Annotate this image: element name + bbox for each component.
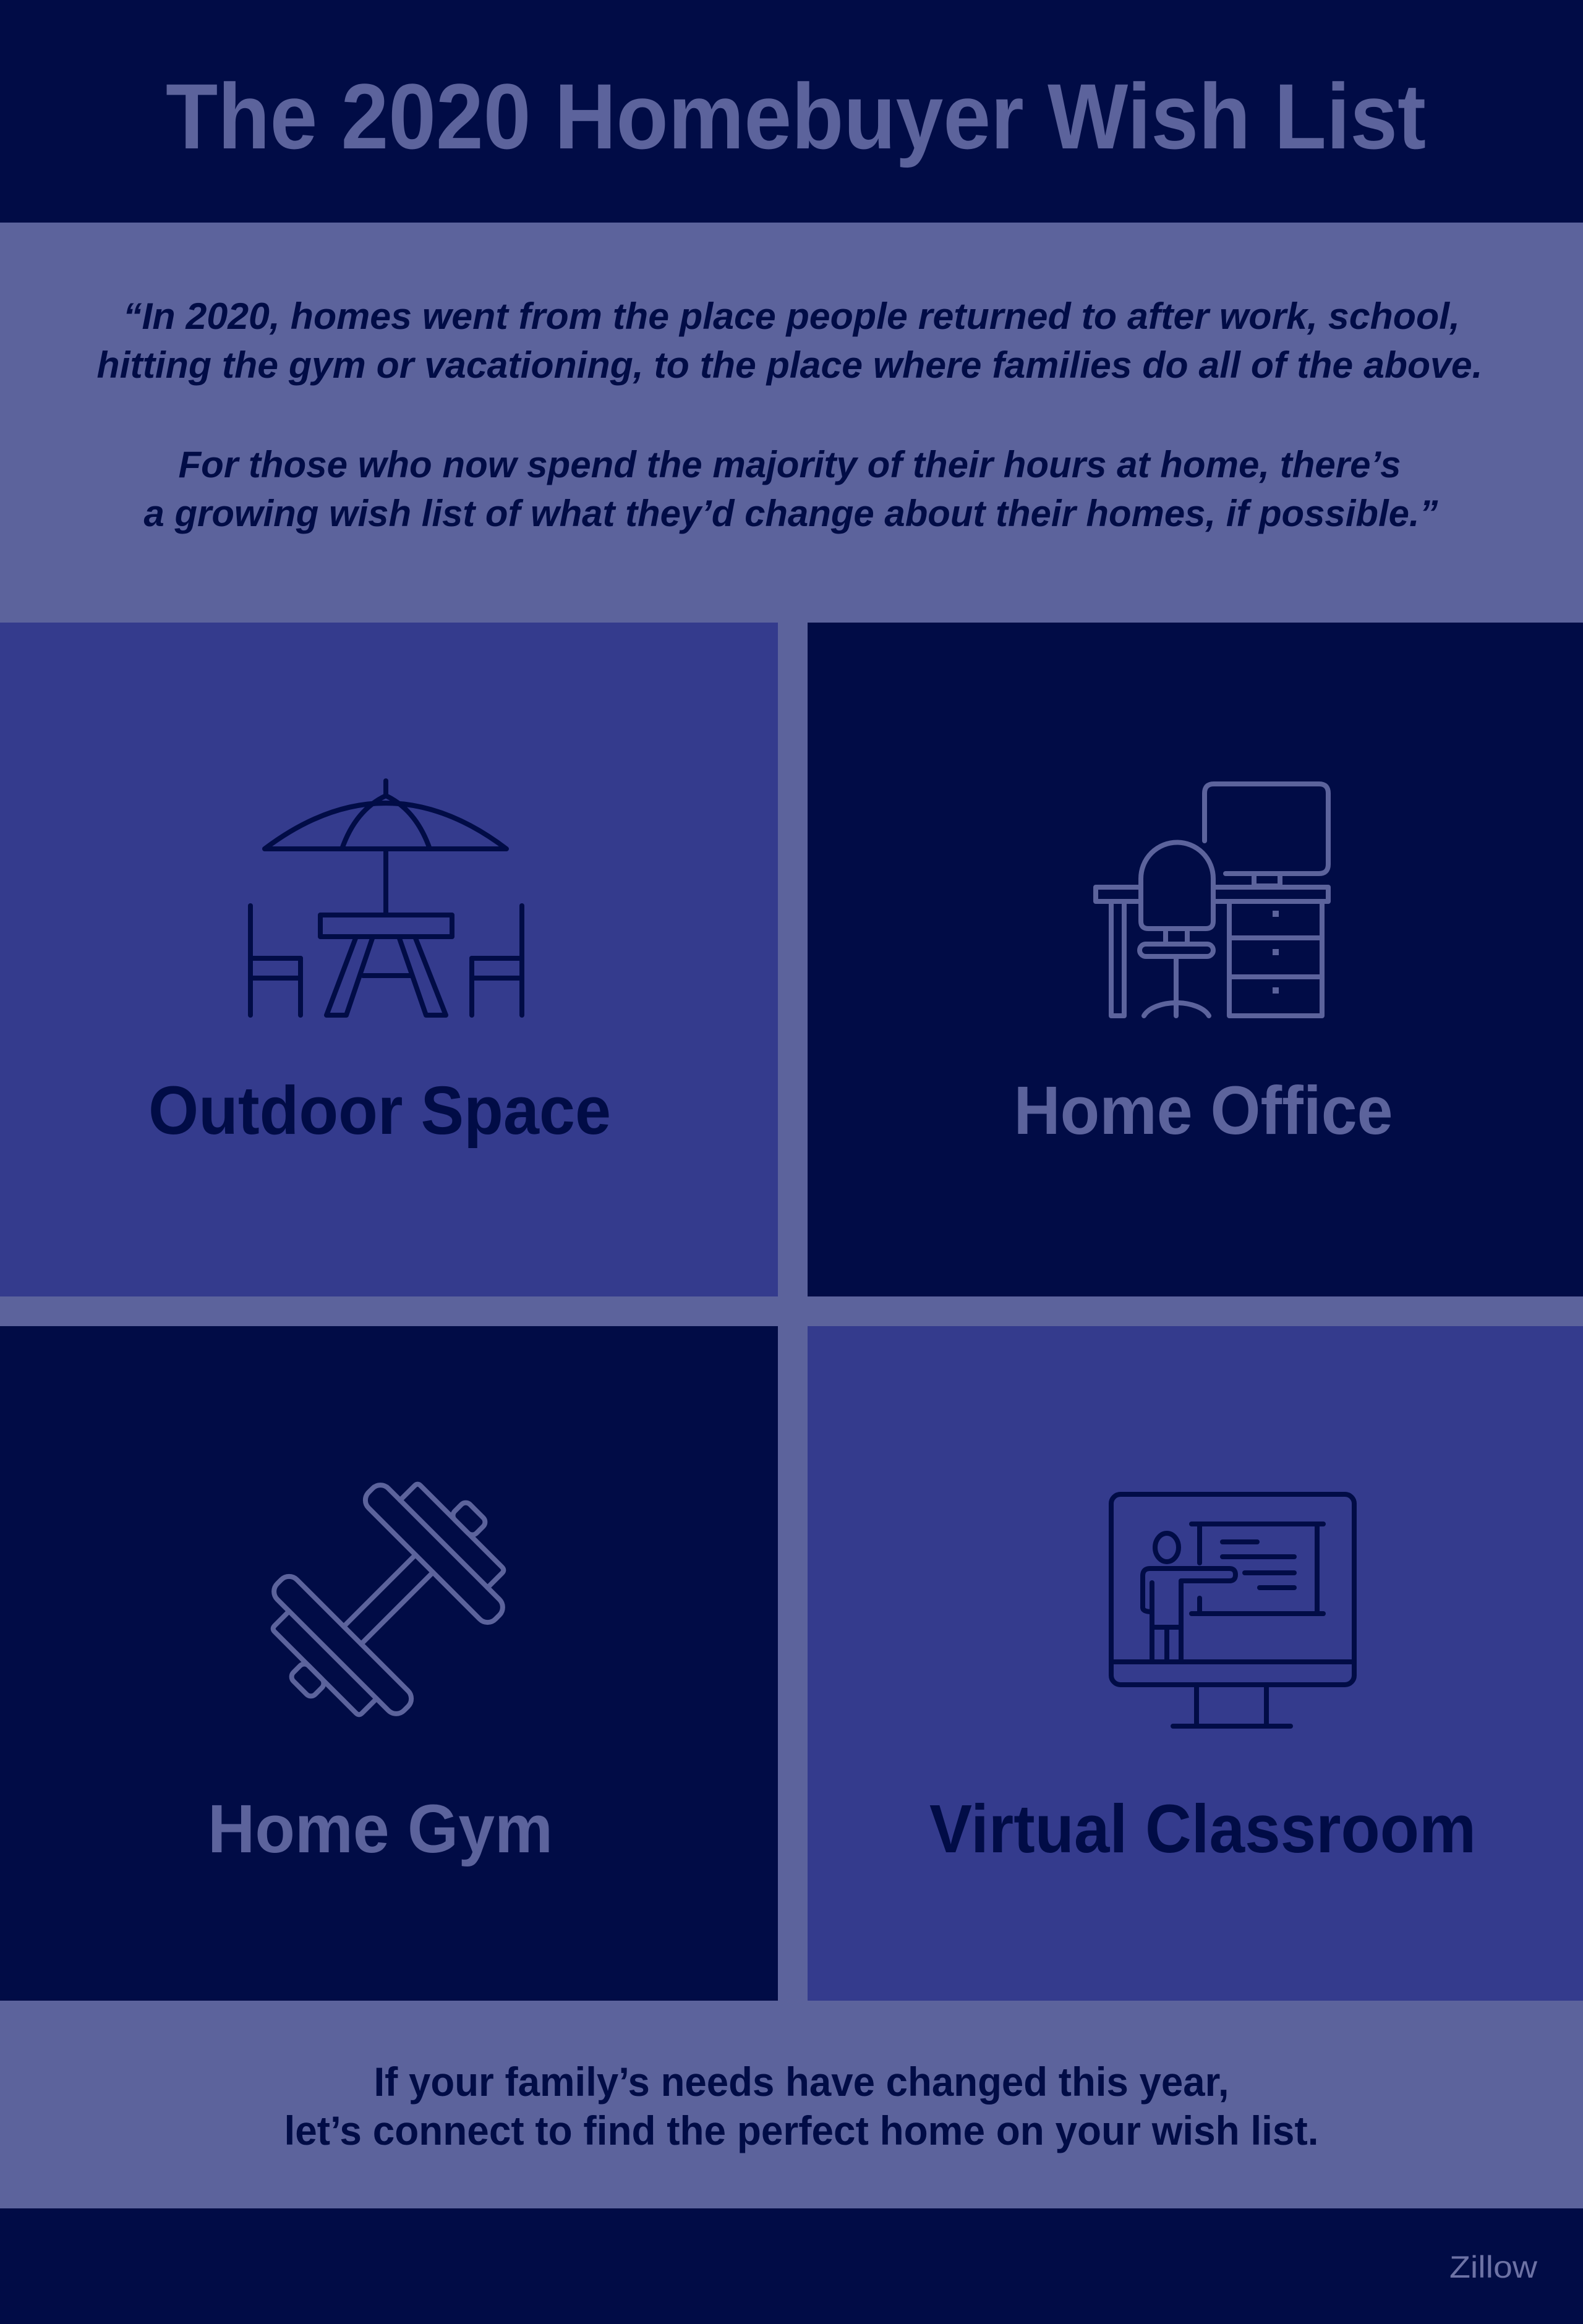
title: The 2020 Homebuyer Wish List [166, 64, 1426, 168]
icon: virtual classroom monitor [1111, 1494, 1354, 1726]
call to action text: let’s connect to find the perfect home on your wish list. [284, 2108, 1318, 2153]
icon: desk and chair [1096, 784, 1328, 1016]
panel: home office [808, 623, 1583, 1296]
logo text: Zillow: Zillow [1449, 2250, 1538, 2284]
label: virtual classroom: Virtual Classroom [929, 1791, 1476, 1867]
call to action text: If your family’s needs have changed this year, [373, 2059, 1229, 2105]
icon: patio umbrella table [250, 781, 522, 1015]
label: home office: Home Office [1014, 1073, 1393, 1149]
quote block: For those who now spend the majority of their hours at home, there’s [178, 444, 1401, 485]
footer band [0, 2208, 1583, 2324]
quote block [96, 296, 1483, 534]
panel: outdoor space [0, 623, 778, 1296]
title band [0, 0, 1583, 223]
label: home gym: Home Gym [208, 1791, 553, 1867]
quote block: “In 2020, homes went from the place people returned to after work, school, [123, 296, 1460, 337]
icon: dumbbell [237, 1448, 540, 1751]
panel: virtual classroom [808, 1326, 1583, 2001]
panel: home gym [0, 1326, 778, 2001]
quote block: hitting the gym or vacationing, to the place where families do all of the above. [96, 344, 1483, 386]
call to action text [284, 2059, 1318, 2153]
label: outdoor space: Outdoor Space [148, 1073, 611, 1149]
quote block: a growing wish list of what they’d change about their homes, if possible.” [143, 493, 1438, 534]
